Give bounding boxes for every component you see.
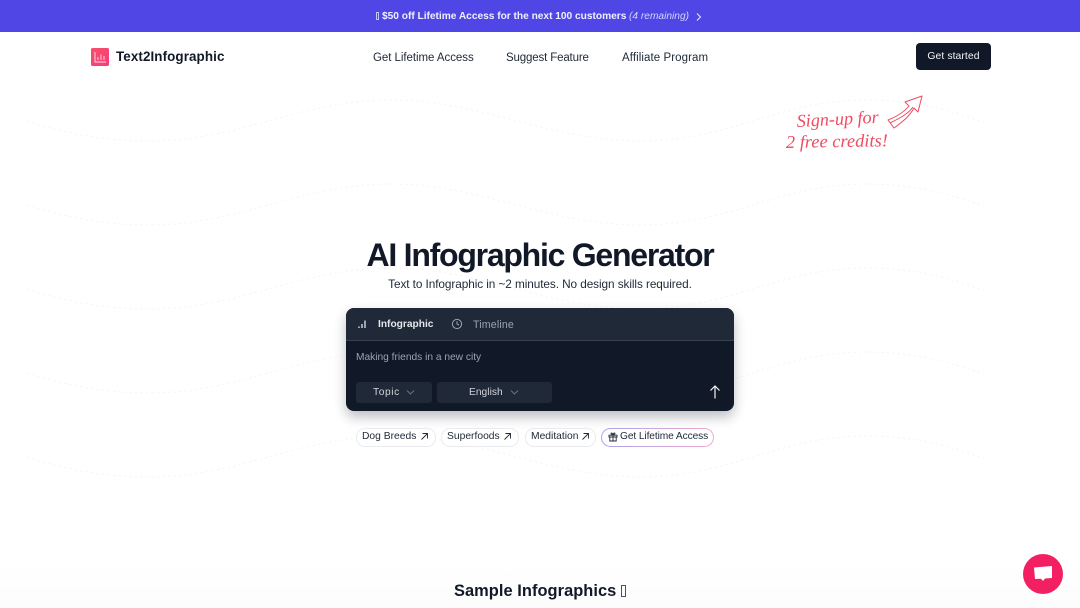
navigation: Affiliate Program: [622, 52, 708, 64]
suggestion: dog breeds: [356, 428, 436, 447]
navigation: [373, 52, 708, 64]
suggestion: dog breeds: Dog Breeds: [362, 431, 416, 442]
icon: signal bars: [358, 320, 366, 328]
title: AI Infographic Generator: [367, 237, 713, 273]
tab: timeline: Timeline: [473, 318, 514, 330]
input placeholder: Making friends in a new city: [356, 352, 481, 363]
promo banner: $50 off Lifetime Access for the next 100 customers: [382, 10, 626, 22]
promo banner: (4 remaining): [629, 10, 689, 22]
panel: prompt generator: [346, 308, 734, 411]
suggestion: superfoods: Superfoods: [447, 431, 500, 442]
callout: sign-up for 2 free credits: 2 free credits!: [786, 130, 888, 152]
icon: clock: [452, 318, 462, 330]
heading: sample infographics: Sample Infographics: [454, 582, 616, 600]
tab: infographic: Infographic: [378, 318, 433, 330]
icon: chat button: [1023, 554, 1063, 594]
dropdown: topic: Topic: [373, 387, 400, 398]
logo: [91, 48, 224, 66]
button: get started: [916, 43, 991, 70]
navigation: Suggest Feature: [506, 52, 589, 64]
suggestion: meditation: Meditation: [531, 431, 579, 442]
suggestion: get lifetime access: [601, 428, 714, 447]
suggestion: superfoods: [441, 428, 519, 447]
icon: logo chart: [91, 48, 109, 66]
navigation: Get Lifetime Access: [373, 52, 474, 64]
suggestion: meditation: [525, 428, 596, 447]
promo banner: [0, 0, 1080, 32]
tab bar: [346, 308, 734, 341]
icon: submit arrow: [710, 385, 720, 398]
callout: sign-up for 2 free credits: [786, 96, 922, 152]
bottom tint: [0, 565, 1080, 608]
icon: arrow: [888, 96, 922, 128]
brand name: Text2Infographic: [116, 49, 224, 64]
subtitle: Text to Infographic in ~2 minutes. No design skills required.: [388, 277, 692, 291]
button: get started: Get started: [927, 51, 980, 62]
dropdown: english: English: [469, 387, 503, 398]
icon: gift: [608, 432, 618, 442]
dropdown: topic: [356, 382, 432, 403]
callout: sign-up for 2 free credits: Sign-up for: [796, 107, 880, 131]
suggestion: get lifetime access: Get Lifetime Access: [620, 431, 708, 442]
dropdown: english: [437, 382, 552, 403]
